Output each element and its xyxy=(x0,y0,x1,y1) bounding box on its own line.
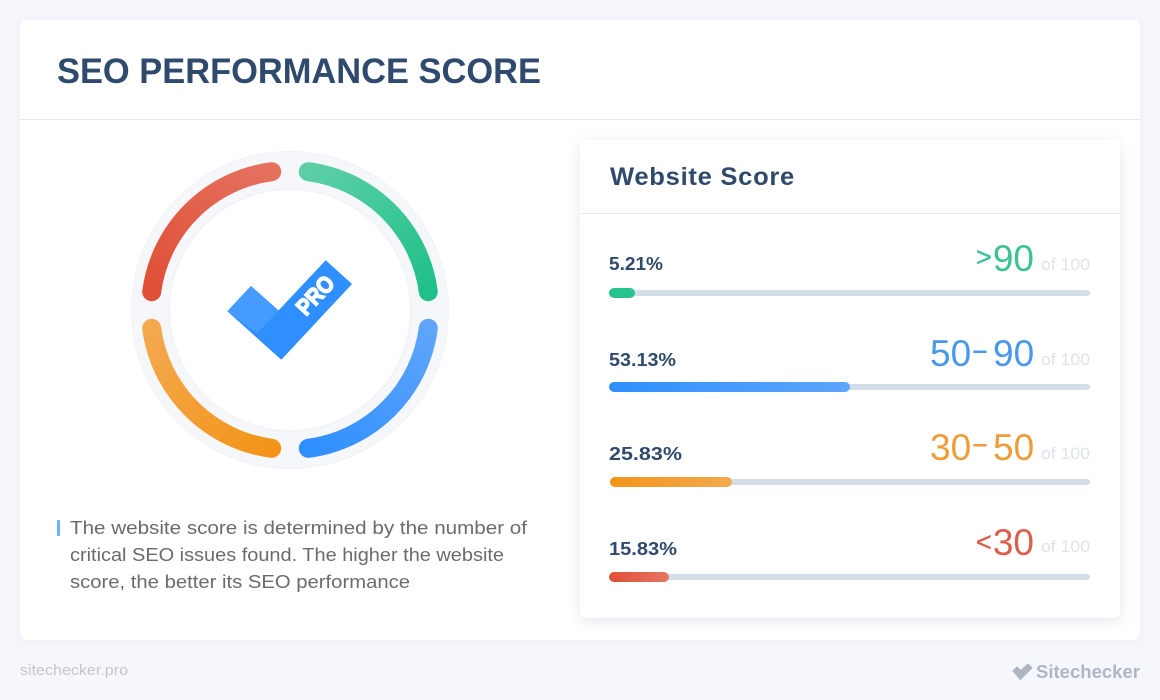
arc: blue xyxy=(308,328,428,448)
row: 30 to 50: 25.83% xyxy=(609,444,682,464)
title: SEO PERFORMANCE SCORE xyxy=(57,52,541,91)
icon: pro check mark xyxy=(227,260,352,360)
row: 30 to 50: - xyxy=(971,426,989,461)
row: 50 to 90: 90 xyxy=(993,333,1034,374)
row: 50 to 90: 53.13% xyxy=(609,350,676,370)
arc: green xyxy=(308,172,428,292)
row: 50 to 90: - xyxy=(971,332,989,367)
description text: critical SEO issues found. The higher the website xyxy=(70,545,504,565)
icon: pro check mark: PRO xyxy=(291,270,340,320)
row: below 30: 15.83% xyxy=(609,539,677,559)
panel: website score xyxy=(580,140,1120,618)
footer: site url: sitechecker.pro xyxy=(20,662,128,679)
description text: score, the better its SEO performance xyxy=(70,572,410,592)
footer: brand logo: Sitechecker xyxy=(1036,662,1140,682)
row: below 30: < xyxy=(976,527,992,557)
icon: brand check xyxy=(1013,664,1032,680)
description text: The website score is determined by the number of xyxy=(70,518,528,538)
row: 30 to 50: 50 xyxy=(993,427,1034,468)
row: above 90: 90 xyxy=(993,238,1034,279)
arc: orange xyxy=(152,328,272,448)
row: above 90: > xyxy=(976,242,992,272)
row: above 90 xyxy=(609,238,1090,298)
row: above 90: of 100 xyxy=(1041,255,1090,274)
row: below 30: 30 xyxy=(993,522,1034,563)
arc: red xyxy=(152,172,272,292)
row: 50 to 90: of 100 xyxy=(1041,350,1090,369)
row: 30 to 50 xyxy=(609,426,1090,487)
row: 30 to 50: 30 xyxy=(930,427,971,468)
score ring xyxy=(132,152,448,468)
description text xyxy=(57,518,528,592)
panel heading: Website Score xyxy=(610,163,795,191)
row: above 90: 5.21% xyxy=(609,254,663,274)
row: 50 to 90: 50 xyxy=(930,333,971,374)
row: 30 to 50: of 100 xyxy=(1041,444,1090,463)
row: below 30: of 100 xyxy=(1041,537,1090,556)
row: 50 to 90 xyxy=(609,332,1090,392)
row: below 30 xyxy=(609,522,1090,582)
